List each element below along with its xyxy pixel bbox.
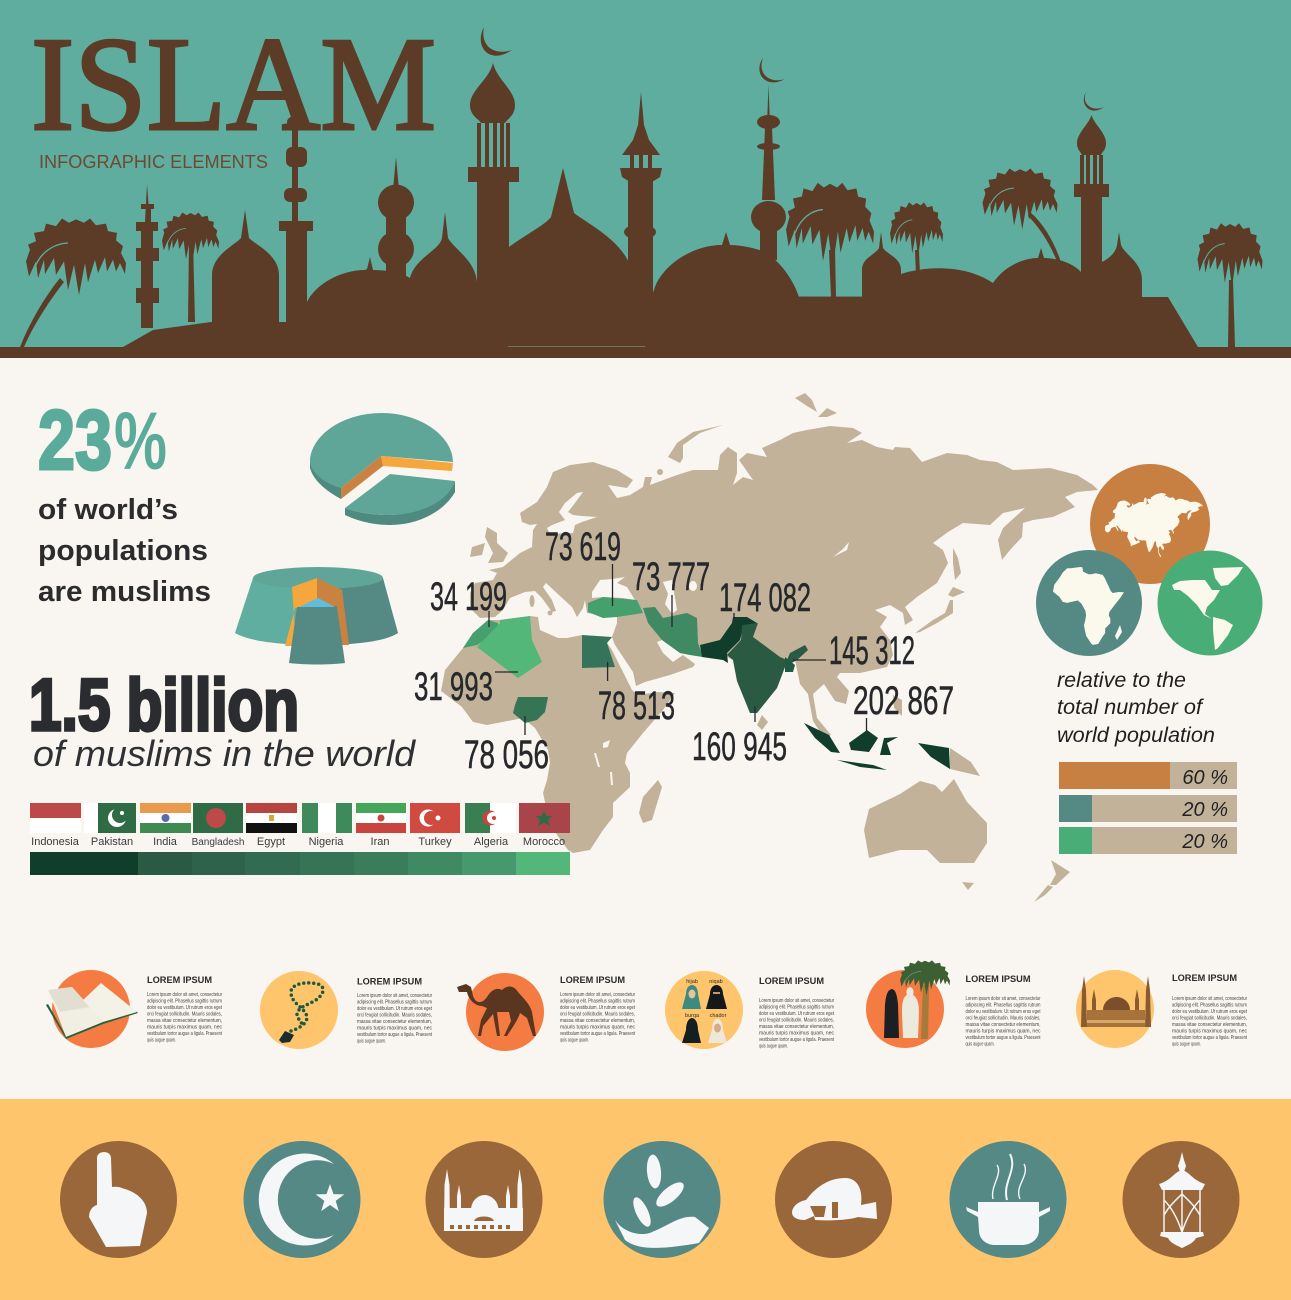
flag: Iran <box>356 803 406 848</box>
icon: hand with coins <box>604 1141 720 1258</box>
minaret: crescent tower <box>751 58 786 260</box>
body text: adipiscing elit. Phasellus sagittis rutrum <box>966 1002 1040 1008</box>
palm tree 2 <box>162 212 219 322</box>
country: Indonesia <box>804 723 950 770</box>
body text: dolor eu vestibulum. Ut rutrum eros eget <box>1172 1009 1247 1015</box>
inland water <box>547 492 849 785</box>
flag: Nigeria <box>302 803 352 848</box>
panel: header with skyline <box>0 0 1291 358</box>
body text: adipiscing elit. Phasellus sagittis rutrum <box>759 1004 834 1010</box>
text: relative to the total number of world population <box>1057 669 1215 747</box>
text: relative to the total number of world population: total number of <box>1057 696 1204 719</box>
flag: Algeria <box>465 803 516 848</box>
eurasia landmass <box>470 426 1098 738</box>
body text: orci feugiat sollicitudin. Mauris sodales, <box>560 1012 635 1018</box>
flag: Nigeria: Nigeria <box>309 836 344 848</box>
palm tree 6 <box>1198 223 1262 347</box>
map <box>441 393 1098 902</box>
body text: quis augue quam. <box>966 1042 994 1048</box>
label: Nigeria <box>464 716 549 777</box>
base highlight line <box>508 346 645 347</box>
label: India <box>692 706 787 769</box>
panel: bottom icon band <box>0 1099 1291 1300</box>
flag: Morocco: Morocco <box>523 836 565 848</box>
body text: mauris turpis maximus quam, nec <box>759 1030 834 1036</box>
info item 2: prayer beads <box>260 971 432 1049</box>
minaret: small left <box>136 184 159 328</box>
body text <box>560 992 635 1044</box>
flag: India: India <box>153 836 178 848</box>
flag: Turkey: Turkey <box>418 836 452 848</box>
flag: Pakistan <box>84 803 136 848</box>
body text: adipiscing elit. Phasellus sagittis rutrum <box>560 998 635 1004</box>
country: Iran <box>643 607 703 657</box>
body text: orci feugiat sollicitudin. Mauris sodales, <box>147 1012 222 1018</box>
minaret: right <box>1074 92 1109 302</box>
body text: dolor eu vestibulum. Ut rutrum eros eget <box>759 1011 834 1017</box>
icon: camel <box>457 973 544 1051</box>
chart: 3D cylinder cutaway <box>235 567 398 664</box>
label: Turkey: 73 619 <box>545 525 621 569</box>
info item 5: couple and palm <box>866 960 1041 1048</box>
label: Morocco: 34 199 <box>430 575 507 619</box>
minaret: pointed roof <box>620 92 662 300</box>
icon: four veil types: chador <box>710 1013 727 1019</box>
body text: orci feugiat sollicitudin. Mauris sodales, <box>966 1016 1040 1022</box>
body text: mauris turpis maximus quam, nec <box>357 1026 432 1032</box>
body text: adipiscing elit. Phasellus sagittis rutrum <box>1172 1002 1247 1008</box>
body text: Lorem ipsum dolor sit amet, consectetur <box>759 998 834 1004</box>
text: of world's populations are muslims <box>38 494 211 608</box>
flag: Bangladesh: Bangladesh <box>192 837 244 848</box>
label: Iran: 73 777 <box>632 555 710 599</box>
icon: prayer beads <box>260 971 338 1049</box>
body text: Lorem ipsum dolor sit amet, consectetur <box>966 996 1041 1002</box>
chart: 3D pie <box>310 413 455 525</box>
country: India <box>727 623 808 713</box>
body text: quis augue quam. <box>147 1038 176 1044</box>
label: Indonesia <box>853 679 954 731</box>
label: Pakistan: 174 082 <box>719 576 811 620</box>
flag: Egypt: Egypt <box>257 836 285 848</box>
panel: continents share <box>1036 464 1262 854</box>
label: Algeria: 31 993 <box>414 665 493 709</box>
label: Morocco <box>430 575 507 627</box>
bar: 20 percent teal <box>1059 795 1237 822</box>
icon: prostrating figure <box>775 1141 892 1258</box>
body text: quis augue quam. <box>560 1038 589 1044</box>
body text: vestibulum tortor augue a ligula. Praesent <box>357 1032 432 1038</box>
icon: cooking pot with steam <box>950 1141 1066 1258</box>
body text: dolor eu vestibulum. Ut rutrum eros eget <box>147 1005 222 1011</box>
icon: white mosque <box>426 1141 542 1258</box>
body text: quis augue quam. <box>357 1038 386 1044</box>
flag: India <box>140 803 191 848</box>
icon: colored mosque <box>1076 970 1154 1048</box>
bar: 20 percent green: 20 % <box>1181 831 1228 853</box>
label: Bangladesh: 145 312 <box>829 629 915 673</box>
icon: four veil types <box>665 971 743 1049</box>
text: of muslims in the world: of muslims in the world <box>33 733 416 774</box>
body text <box>147 992 222 1044</box>
flags row <box>30 803 570 848</box>
bar: 20 percent teal: 20 % <box>1181 799 1228 821</box>
circle: Americas <box>1158 550 1262 656</box>
text: of world's populations are muslims: are muslims <box>38 576 211 608</box>
body text: adipiscing elit. Phasellus sagittis rutrum <box>147 998 222 1004</box>
heading: LOREM IPSUM <box>560 975 625 986</box>
flag: Iran: Iran <box>371 836 389 848</box>
label: Pakistan <box>719 576 811 620</box>
flag: Indonesia <box>30 803 81 848</box>
icon: open book <box>46 970 138 1048</box>
body text: vestibulum tortor augue a ligula. Praesent <box>759 1037 834 1043</box>
label: Turkey <box>545 525 621 606</box>
map population labels <box>414 525 954 777</box>
body text: mauris turpis maximus quam, nec <box>560 1024 635 1030</box>
body text: orci feugiat sollicitudin. Mauris sodales, <box>357 1012 432 1018</box>
stat: 23 percent: 23 <box>38 393 112 487</box>
flag: Bangladesh <box>192 803 244 848</box>
body text: dolor eu vestibulum. Ut rutrum eros eget <box>560 1005 635 1011</box>
icon: lantern <box>1122 1141 1240 1258</box>
country: Bangladesh <box>785 657 795 672</box>
band background <box>0 1099 1291 1300</box>
skyline silhouette <box>0 27 1291 358</box>
icon: four veil types: burqa <box>685 1013 700 1019</box>
body text: mauris turpis maximus quam, nec <box>147 1024 222 1030</box>
palm tree 1 <box>20 219 126 347</box>
body text: Lorem ipsum dolor sit amet, consectetur <box>357 993 432 999</box>
body text: adipiscing elit. Phasellus sagittis rutrum <box>357 1000 432 1006</box>
bar: 20 percent green <box>1059 827 1237 854</box>
gradient ranking bar <box>30 852 570 875</box>
body text: massa vitae consectetur elementum, <box>966 1022 1040 1028</box>
body text <box>759 998 834 1050</box>
body text: quis augue quam. <box>759 1044 788 1050</box>
heading: LOREM IPSUM <box>147 975 212 986</box>
flag: Turkey <box>410 803 460 848</box>
icon: four veil types: niqab <box>709 979 723 985</box>
label: India: 160 945 <box>692 725 787 769</box>
body text <box>1172 996 1247 1048</box>
subtitle: INFOGRAPHIC ELEMENTS <box>39 152 268 172</box>
body text: dolor eu vestibulum. Ut rutrum eros eget <box>966 1009 1041 1015</box>
heading: LOREM IPSUM <box>357 976 422 988</box>
body text: Lorem ipsum dolor sit amet, consectetur <box>1172 996 1247 1002</box>
label: Nigeria: 78 056 <box>464 733 549 777</box>
body text: mauris turpis maximus quam, nec <box>1172 1028 1247 1034</box>
label: Egypt <box>598 662 675 728</box>
body text: vestibulum tortor augue a ligula. Praesent <box>1172 1035 1247 1041</box>
info row <box>46 960 1247 1051</box>
body text: Lorem ipsum dolor sit amet, consectetur <box>147 992 222 998</box>
stat: 23 percent: % <box>114 396 167 487</box>
icon: four veil types: hijab <box>686 979 698 985</box>
bar: 60 percent <box>1059 762 1237 789</box>
palm tree 3 <box>786 183 874 297</box>
body text: massa vitae consectetur elementum, <box>560 1018 635 1024</box>
body text: massa vitae consectetur elementum, <box>147 1018 222 1024</box>
body text: massa vitae consectetur elementum, <box>759 1024 834 1030</box>
body text: vestibulum tortor augue a ligula. Praesent <box>560 1031 635 1037</box>
africa landmass <box>441 616 675 853</box>
flag: Morocco <box>519 803 570 848</box>
label: Egypt: 78 513 <box>598 684 675 728</box>
header background <box>0 0 1291 358</box>
heading: LOREM IPSUM <box>966 974 1031 985</box>
text: relative to the total number of world population: relative to the <box>1057 669 1186 692</box>
body text: mauris turpis maximus quam, nec <box>966 1028 1041 1034</box>
icon: raised finger <box>60 1141 177 1258</box>
body text: massa vitae consectetur elementum, <box>357 1019 432 1025</box>
heading: LOREM IPSUM <box>1172 973 1237 984</box>
bar: 60 percent: 60 % <box>1182 767 1228 789</box>
icon: crescent and star <box>244 1141 360 1258</box>
body text: vestibulum tortor augue a ligula. Praesent <box>966 1035 1041 1041</box>
body text: dolor eu vestibulum. Ut rutrum eros eget <box>357 1006 432 1012</box>
text: of world's populations are muslims: of world’s <box>38 494 178 526</box>
country: Egypt <box>582 635 615 668</box>
info item 1: book <box>46 970 222 1048</box>
country: Nigeria <box>513 697 548 723</box>
body text: orci feugiat sollicitudin. Mauris sodales, <box>759 1018 834 1024</box>
circle: Eurasia <box>1090 464 1210 584</box>
country: Turkey <box>588 597 643 618</box>
body text: massa vitae consectetur elementum, <box>1172 1022 1247 1028</box>
country: Algeria <box>477 616 542 678</box>
label: Iran <box>632 555 710 627</box>
country: Pakistan <box>700 617 757 663</box>
title: ISLAM <box>31 10 436 158</box>
minaret: tall ringed <box>279 116 313 322</box>
icon: couple and palm <box>866 960 950 1048</box>
body text <box>966 996 1041 1048</box>
minaret: onion dome <box>468 27 519 302</box>
flag: Indonesia: Indonesia <box>31 836 80 848</box>
heading: LOREM IPSUM <box>759 976 824 987</box>
text: relative to the total number of world population: world population <box>1057 724 1215 747</box>
stat: 1.5 billion: 1.5 billion <box>29 665 299 746</box>
circle: Africa <box>1036 550 1142 656</box>
flag: Egypt <box>246 803 297 848</box>
label: Indonesia: 202 867 <box>853 679 954 723</box>
body text: quis augue quam. <box>1172 1042 1201 1048</box>
country: Morocco <box>463 620 498 648</box>
body text: Lorem ipsum dolor sit amet, consectetur <box>560 992 635 998</box>
palm tree 4 <box>890 202 943 275</box>
body text: orci feugiat sollicitudin. Mauris sodales, <box>1172 1016 1247 1022</box>
body text <box>357 993 432 1044</box>
palm tree 5 <box>982 169 1061 264</box>
minaret: double ball <box>378 157 414 280</box>
info item 3: camel <box>457 973 635 1051</box>
info item 6: mosque <box>1076 970 1247 1048</box>
flag: Pakistan: Pakistan <box>91 836 133 848</box>
text: of world's populations are muslims: populations <box>38 535 208 567</box>
info item 4: veils <box>665 971 834 1050</box>
islands and other land <box>470 393 1070 902</box>
flag: Algeria: Algeria <box>474 836 509 848</box>
label: Bangladesh <box>793 629 915 673</box>
body text: vestibulum tortor augue a ligula. Praesent <box>147 1031 222 1037</box>
